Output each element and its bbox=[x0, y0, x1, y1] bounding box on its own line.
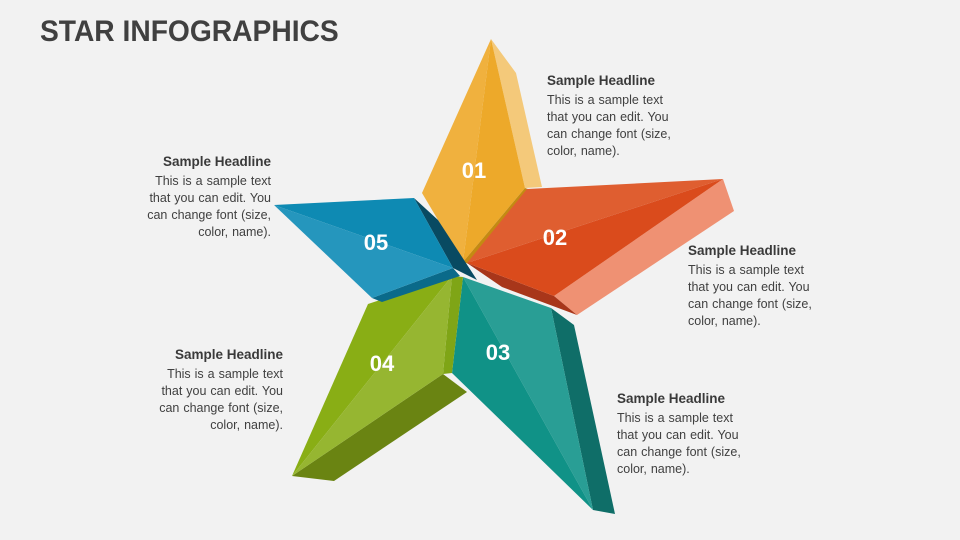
text 01: Sample Headline bbox=[547, 73, 655, 88]
text 05 bbox=[147, 154, 271, 239]
text 04: This is a sample text bbox=[167, 367, 283, 381]
text 01: color, name). bbox=[547, 144, 620, 158]
arm 05 bbox=[274, 198, 477, 302]
text 03: can change font (size, bbox=[617, 445, 741, 459]
arm 01 bbox=[422, 39, 542, 264]
text 05: can change font (size, bbox=[147, 208, 271, 222]
text 02: color, name). bbox=[688, 314, 761, 328]
text 02: can change font (size, bbox=[688, 297, 812, 311]
text 01: This is a sample text bbox=[547, 93, 663, 107]
text 02 bbox=[688, 243, 812, 328]
arm 02 bbox=[467, 179, 734, 315]
text 01: that you can edit. You bbox=[547, 110, 669, 124]
arm 04 bbox=[292, 276, 467, 481]
text 02: that you can edit. You bbox=[688, 280, 810, 294]
text 04: that you can edit. You bbox=[161, 384, 283, 398]
text 05: Sample Headline bbox=[163, 154, 271, 169]
text 04: can change font (size, bbox=[159, 401, 283, 415]
text 05: color, name). bbox=[198, 225, 271, 239]
text 02: Sample Headline bbox=[688, 243, 796, 258]
text 02: This is a sample text bbox=[688, 263, 804, 277]
text 03: that you can edit. You bbox=[617, 428, 739, 442]
text 03: This is a sample text bbox=[617, 411, 733, 425]
arm 02: 02 bbox=[543, 225, 567, 250]
text 04 bbox=[159, 347, 283, 432]
text 05: that you can edit. You bbox=[149, 191, 271, 205]
arm 03 bbox=[452, 277, 615, 514]
text 01 bbox=[547, 73, 671, 158]
text 03 bbox=[617, 391, 741, 476]
arm 03: 03 bbox=[486, 340, 510, 365]
arm 04: 04 bbox=[370, 351, 395, 376]
arm 01: 01 bbox=[462, 158, 486, 183]
text 05: This is a sample text bbox=[155, 174, 271, 188]
text 01: can change font (size, bbox=[547, 127, 671, 141]
text 03: Sample Headline bbox=[617, 391, 725, 406]
arm 05: 05 bbox=[364, 230, 388, 255]
title: STAR INFOGRAPHICS bbox=[40, 15, 339, 48]
text 03: color, name). bbox=[617, 462, 690, 476]
text 04: color, name). bbox=[210, 418, 283, 432]
text 04: Sample Headline bbox=[175, 347, 283, 362]
